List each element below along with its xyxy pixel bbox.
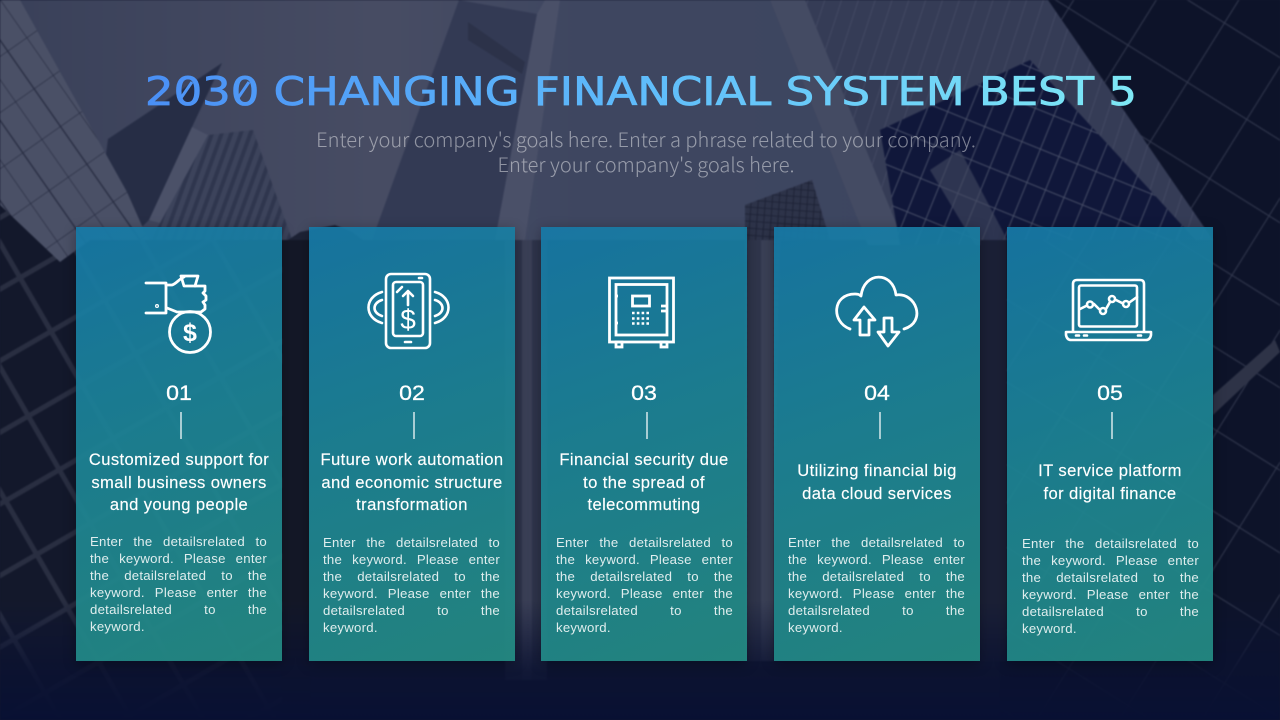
centre lower buildings	[505, 240, 547, 680]
body text: detailsrelated to the	[556, 603, 733, 618]
heading: for digital finance	[1043, 484, 1177, 502]
icon: phone with dollar: $	[400, 304, 416, 335]
heading: Financial security due	[559, 450, 729, 469]
number: 05	[1097, 382, 1123, 405]
body text: the keyword. Please enter	[1022, 553, 1199, 568]
heading	[89, 450, 269, 514]
panel: card 05	[1007, 227, 1213, 661]
subtitle: Enter your company's goals here.	[498, 149, 794, 178]
heading: transformation	[356, 495, 468, 514]
small brick building	[745, 180, 830, 661]
body text: keyword. Please enter the	[1022, 587, 1199, 602]
left dark tower	[90, 63, 222, 277]
striped tower	[148, 130, 294, 245]
body text: detailsrelated to the	[788, 603, 965, 618]
heading	[797, 461, 957, 502]
left lattice building	[0, 0, 175, 300]
divider line	[879, 412, 880, 439]
icon: laptop with chart	[1064, 278, 1152, 342]
body text: Enter the detailsrelated to	[556, 535, 733, 550]
body text: detailsrelated to the	[323, 603, 500, 618]
body text	[90, 534, 267, 634]
subtitle	[316, 124, 976, 178]
central tower	[372, 0, 537, 240]
body text: keyword.	[323, 620, 378, 635]
body text: keyword.	[556, 620, 611, 635]
body text: keyword.	[788, 620, 843, 635]
body text: the keyword. Please enter	[556, 552, 733, 567]
heading: Future work automation	[320, 450, 504, 469]
body text: the detailsrelated to the	[556, 569, 733, 584]
heading: Customized support for	[89, 450, 269, 469]
panel: card 04	[774, 227, 980, 661]
divider line	[413, 412, 414, 439]
body text: the keyword. Please enter	[323, 552, 500, 567]
body text: Enter the detailsrelated to	[323, 535, 500, 550]
subtitle: Enter your company's goals here. Enter a phrase related to your company.	[316, 124, 976, 153]
body text: the detailsrelated to the	[1022, 570, 1199, 585]
body text	[1022, 536, 1199, 636]
body text: Enter the detailsrelated to	[90, 534, 267, 549]
body text: the detailsrelated to the	[90, 568, 267, 583]
number: 03	[631, 382, 657, 405]
right glass tower	[770, 0, 1280, 245]
title: 2030 CHANGING FINANCIAL SYSTEM BEST 5	[145, 70, 1137, 115]
bottom fade	[0, 600, 1280, 720]
body text: keyword. Please enter the	[323, 586, 500, 601]
heading: and young people	[110, 495, 248, 514]
gap between cards 1 and 2	[282, 240, 310, 720]
centre lower base	[310, 240, 1000, 720]
body text: keyword.	[90, 619, 145, 634]
body text: detailsrelated to the	[1022, 604, 1199, 619]
heading: telecommuting	[587, 495, 701, 514]
number: 04	[864, 382, 890, 405]
heading: and economic structure	[321, 472, 503, 492]
body text: the keyword. Please enter	[788, 552, 965, 567]
number: 01	[166, 382, 192, 405]
body text: keyword. Please enter the	[788, 586, 965, 601]
icon: cloud transfer	[835, 276, 918, 348]
lower left dark lattice	[0, 205, 310, 720]
body text: detailsrelated to the	[90, 602, 267, 617]
icon: hand holding money bag: $	[183, 319, 197, 347]
body text: keyword. Please enter the	[90, 585, 267, 600]
heading: small business owners	[91, 472, 267, 492]
body text: the keyword. Please enter	[90, 551, 267, 566]
number: 02	[399, 382, 425, 405]
body text	[323, 535, 500, 635]
heading: to the spread of	[583, 472, 705, 492]
divider line	[646, 412, 648, 439]
heading	[320, 450, 504, 514]
body text	[556, 535, 733, 635]
heading: data cloud services	[802, 484, 952, 502]
icon: phone with dollar	[367, 272, 450, 350]
divider line	[1111, 412, 1112, 439]
icon: hand holding money bag	[144, 274, 212, 354]
heading: Utilizing financial big	[797, 461, 957, 480]
heading	[559, 450, 729, 514]
divider line	[180, 412, 182, 439]
body text: the detailsrelated to the	[323, 569, 500, 584]
panel: card 02	[309, 227, 515, 661]
body text: keyword.	[1022, 621, 1077, 636]
body text: Enter the detailsrelated to	[788, 535, 965, 550]
heading	[1038, 461, 1182, 503]
body text	[788, 535, 965, 635]
heading: IT service platform	[1038, 461, 1182, 480]
body text: Enter the detailsrelated to	[1022, 536, 1199, 551]
panel: card 03	[541, 227, 747, 661]
body text: the detailsrelated to the	[788, 569, 965, 584]
panel: card 01	[76, 227, 282, 661]
body text: keyword. Please enter the	[556, 586, 733, 601]
icon: safe	[608, 276, 675, 348]
